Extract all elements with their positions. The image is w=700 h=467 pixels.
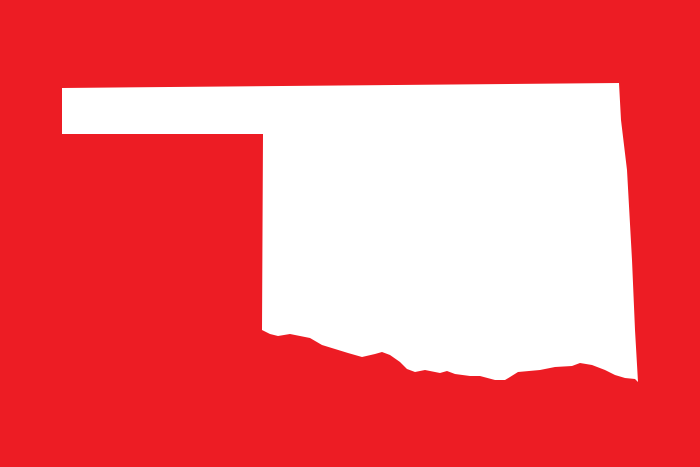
icon: Oklahoma state shape	[62, 83, 638, 382]
